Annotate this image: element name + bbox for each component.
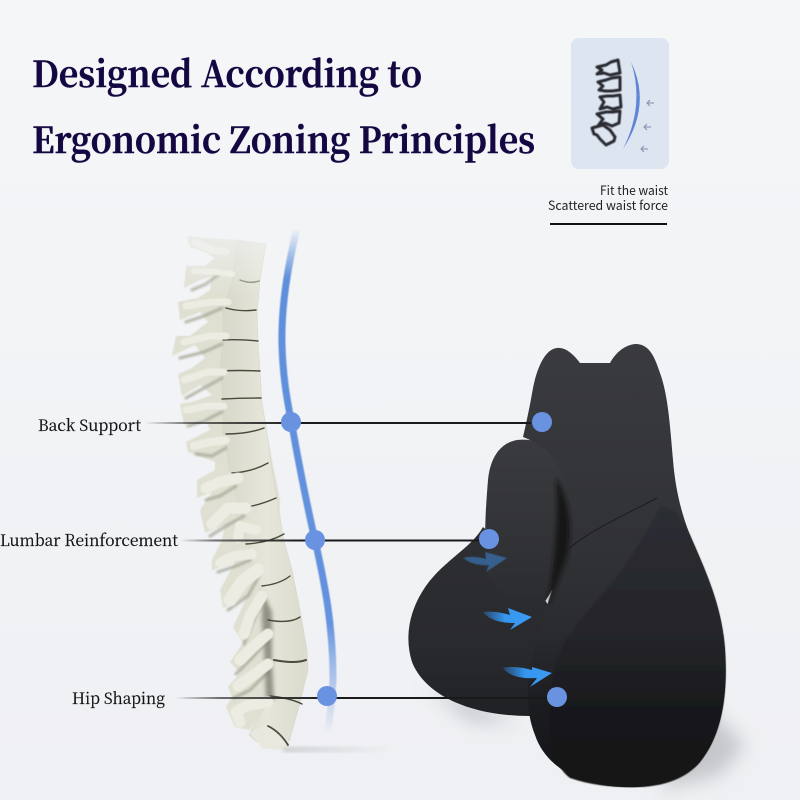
- discs: [220, 280, 306, 745]
- icon: vertebrae outline: [592, 60, 621, 145]
- pillow shadows: [425, 685, 745, 790]
- spine shadow: [283, 747, 393, 752]
- text block: diagram caption: Scattered waist force: [548, 195, 668, 214]
- dark groove: [548, 478, 570, 606]
- lower hip panel: [549, 507, 726, 787]
- title: Designed According to: [32, 47, 422, 98]
- spine illustration: [172, 236, 308, 750]
- labels: [0, 413, 178, 709]
- icon: small arrows: [641, 100, 654, 152]
- main back panel: [523, 344, 726, 787]
- icon: blue lumbar arc: [623, 62, 640, 149]
- labels: Hip Shaping: [72, 686, 165, 709]
- process shading: [180, 272, 268, 698]
- seam: [567, 498, 657, 550]
- title: [32, 47, 535, 164]
- pillow: lumbar cushion: [408, 344, 726, 787]
- process silhouette: [172, 236, 280, 730]
- title: Ergonomic Zoning Principles: [32, 113, 535, 164]
- bottom vertebra cap: [250, 731, 290, 750]
- process highlights: [184, 243, 268, 722]
- text block: diagram caption: [548, 180, 668, 214]
- arrow: lower blue arrow: [503, 667, 552, 687]
- back left lobe: [408, 527, 570, 716]
- arrow: middle blue arrow: [483, 608, 532, 630]
- spine curve: blue line: [282, 228, 333, 732]
- labels: Back Support: [38, 413, 141, 436]
- leader lines: [145, 422, 550, 699]
- labels: Lumbar Reinforcement: [0, 528, 178, 551]
- arrow: upper blue arrow: [463, 552, 507, 572]
- shadow beside lumbar bodies: [262, 590, 274, 700]
- mid lumbar pad: [485, 440, 570, 610]
- panel: lumbar diagram card: [571, 38, 669, 169]
- marker dots: [281, 412, 567, 707]
- vertebral column: [220, 240, 308, 749]
- text block: diagram caption: Fit the waist: [600, 180, 668, 199]
